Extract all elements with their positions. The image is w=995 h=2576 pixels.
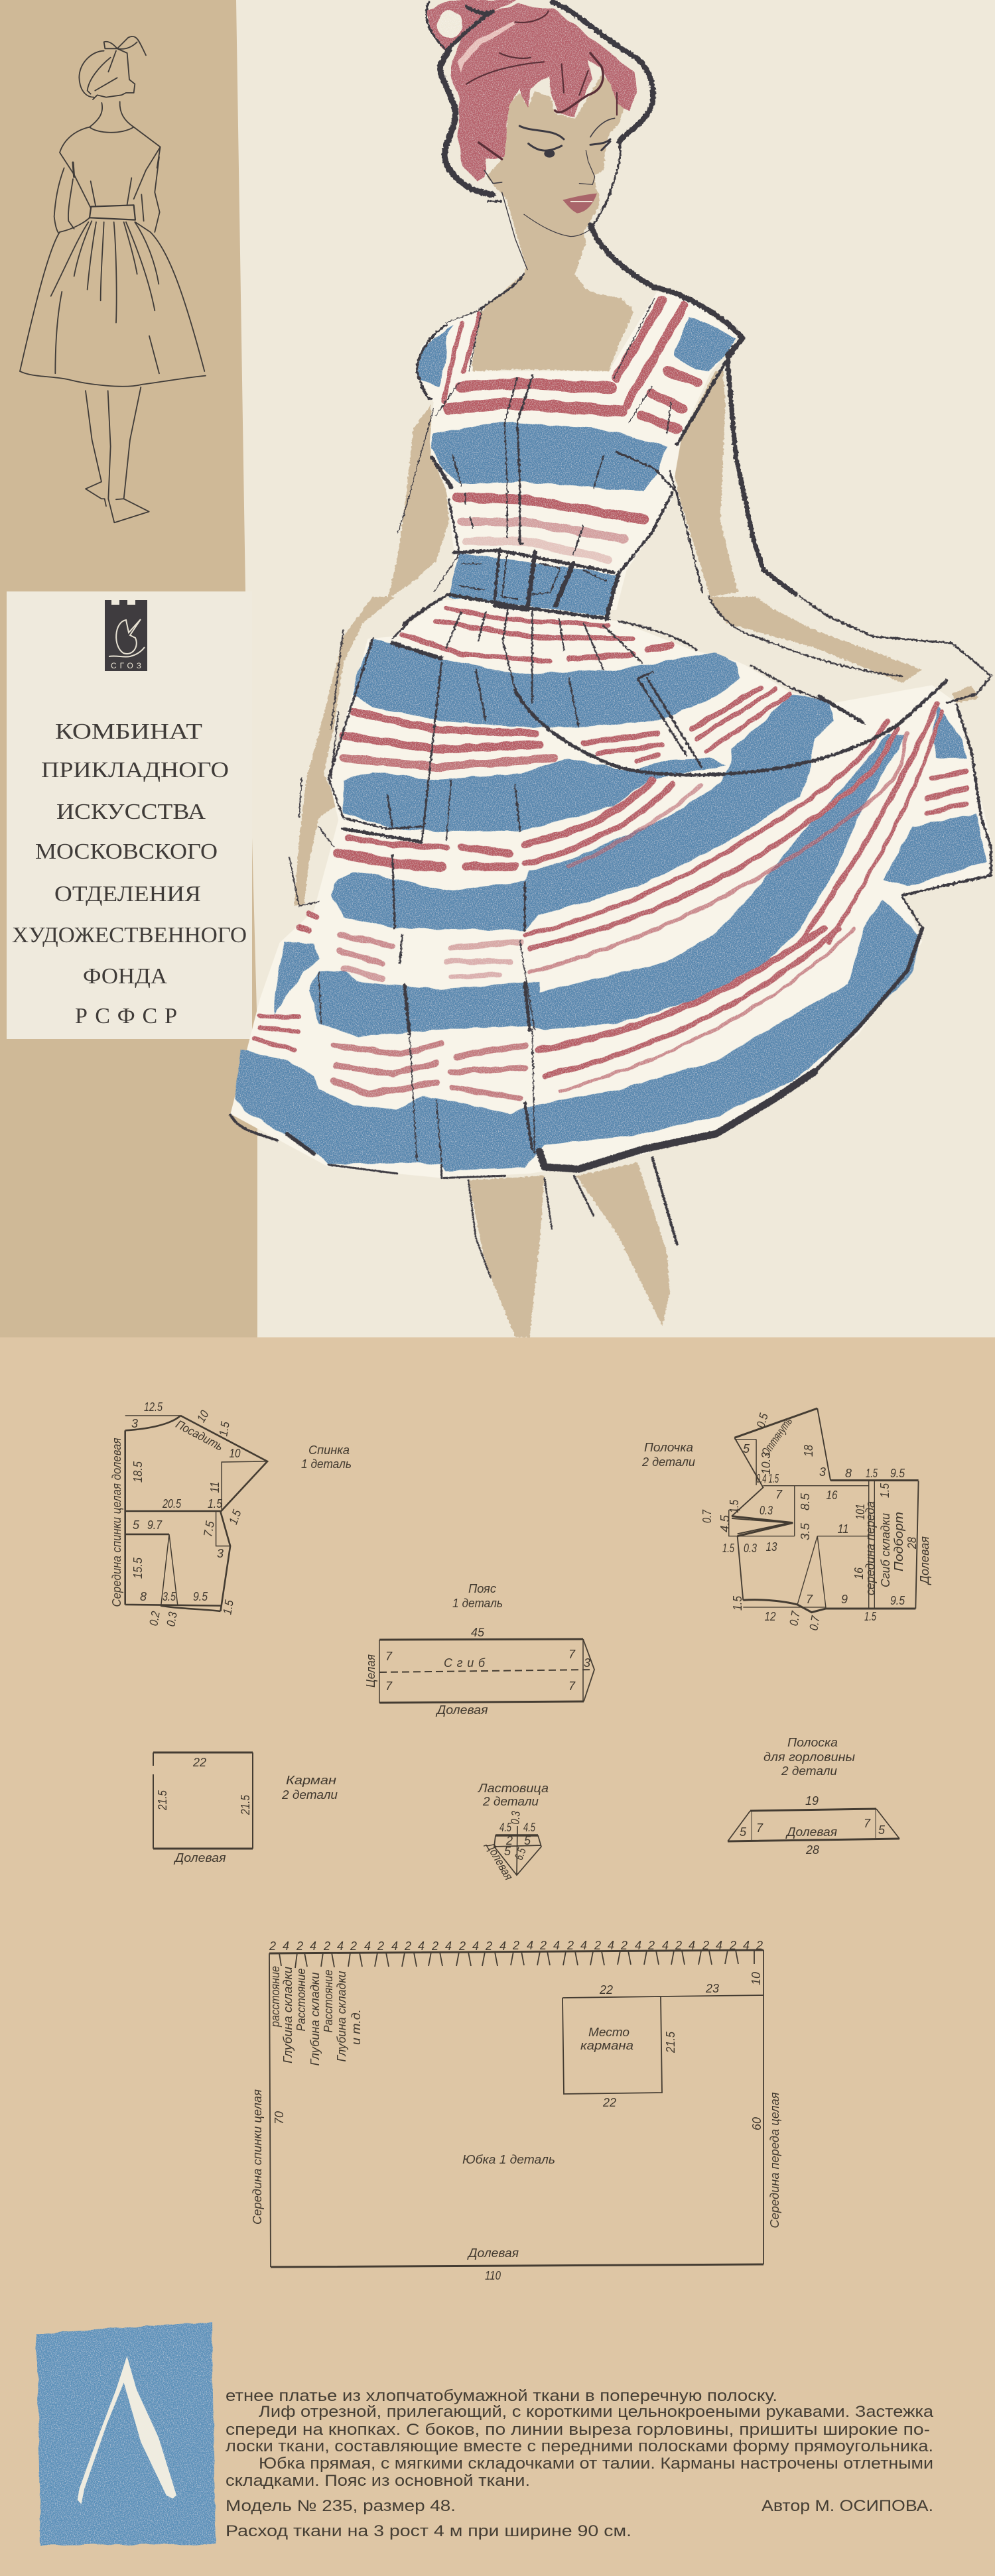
pattern piece: skirt (Юбка): 21.5 bbox=[664, 2031, 677, 2054]
pattern piece: gusset (Ластовица): 4.5 bbox=[499, 1821, 512, 1834]
pleat numbers row: 2 bbox=[458, 1939, 466, 1953]
pattern piece: front (Полочка): Оттянуть bbox=[759, 1415, 795, 1458]
pattern piece: pocket (Карман): 21.5 bbox=[156, 1790, 169, 1811]
pattern piece: neckline strip (Полоска): Долевая bbox=[785, 1825, 837, 1839]
article text: Лиф отрезной, прилегающий, с короткими цельнокроеными рукавами. Застежка bbox=[259, 2403, 934, 2421]
panel: atelier card bbox=[7, 591, 252, 1039]
pleat numbers row: 2 bbox=[756, 1939, 763, 1952]
arms and legs skin bbox=[295, 371, 978, 1337]
pleat numbers row: 2 bbox=[675, 1939, 682, 1952]
pleat numbers row: 4 bbox=[553, 1939, 560, 1952]
pattern piece: front (Полочка): 0.3 bbox=[744, 1542, 757, 1555]
pattern piece: skirt (Юбка): расстояние bbox=[269, 1966, 282, 2028]
pattern piece: front (Полочка): 2 детали bbox=[641, 1455, 695, 1469]
pattern piece: back (Спинка): Спинка bbox=[308, 1443, 350, 1457]
pattern piece: belt (Пояс): Целая bbox=[364, 1654, 377, 1687]
pattern piece: front (Полочка): 0.7 bbox=[700, 1509, 714, 1523]
pattern piece: front (Полочка): 1.5 bbox=[866, 1467, 878, 1480]
pattern piece: belt (Пояс): 7 bbox=[568, 1648, 576, 1661]
article text: Модель № 235, размер 48. bbox=[226, 2497, 456, 2515]
pleat numbers row: 2 bbox=[296, 1939, 303, 1953]
pattern piece: front (Полочка): 0.4 1.5 bbox=[756, 1472, 779, 1485]
card heading text bbox=[12, 719, 247, 1028]
pattern piece: gusset (Ластовица): Ластовица bbox=[478, 1782, 549, 1795]
pattern piece: front (Полочка): 9.5 bbox=[890, 1467, 905, 1480]
pattern piece: skirt (Юбка): 22 bbox=[602, 2096, 616, 2109]
card heading text: ФОНДА bbox=[83, 964, 167, 989]
card heading text: ХУДОЖЕСТВЕННОГО bbox=[12, 923, 247, 948]
dress white fabric base bbox=[230, 292, 991, 1178]
pattern piece: front (Полочка): 16 bbox=[827, 1489, 838, 1502]
pleat numbers row: 2 bbox=[647, 1939, 655, 1952]
pattern piece: gusset (Ластовица): 2 bbox=[505, 1834, 513, 1847]
pattern piece: back (Спинка): 10 bbox=[194, 1408, 212, 1424]
pattern piece: belt (Пояс): 3 bbox=[584, 1656, 590, 1670]
pattern piece: neckline strip (Полоска): 5 bbox=[878, 1823, 886, 1837]
pattern piece: front (Полочка): 18 bbox=[802, 1445, 815, 1457]
pattern piece: front (Полочка): 11 bbox=[837, 1522, 849, 1536]
pattern piece: back (Спинка): 1.5 bbox=[208, 1497, 223, 1510]
card heading text: РСФСР bbox=[75, 1004, 177, 1028]
pattern piece: back (Спинка): 1.5 bbox=[216, 1420, 232, 1438]
pattern piece: gusset (Ластовица): 4.5 bbox=[523, 1821, 536, 1834]
pleat numbers row: 2 bbox=[702, 1939, 709, 1952]
pattern piece: back (Спинка): 8 bbox=[140, 1590, 147, 1603]
pleat numbers row: 2 bbox=[512, 1939, 519, 1952]
card heading text: ПРИКЛАДНОГО bbox=[41, 758, 229, 782]
pattern piece: back (Спинка): 3.5 bbox=[163, 1590, 176, 1603]
pattern piece: back (Спинка): 11 bbox=[208, 1481, 222, 1493]
pattern piece: neckline strip (Полоска): 7 bbox=[864, 1817, 871, 1830]
pattern piece: front (Полочка): 4.5 bbox=[718, 1514, 732, 1532]
pattern piece: neckline strip (Полоска): 2 детали bbox=[781, 1764, 837, 1778]
pattern piece: skirt (Юбка) bbox=[251, 1939, 781, 2282]
card heading text: МОСКОВСКОГО bbox=[35, 839, 218, 864]
pattern piece: gusset (Ластовица): 5 bbox=[504, 1845, 511, 1858]
pleat numbers row: 4 bbox=[580, 1939, 587, 1952]
pattern piece: gusset (Ластовица): 5 bbox=[524, 1834, 531, 1847]
pattern piece: front (Полочка): Сгиб складки bbox=[879, 1513, 892, 1587]
pattern piece: skirt (Юбка): 60 bbox=[750, 2117, 763, 2130]
article text: лоски ткани, составляющие вместе с передними полосками форму прямоугольника. bbox=[226, 2437, 933, 2455]
card heading text: ОТДЕЛЕНИЯ bbox=[54, 882, 201, 906]
pattern piece: front (Полочка): 0.7 bbox=[807, 1615, 823, 1632]
pattern piece: neckline strip (Полоска): для горловины bbox=[763, 1750, 855, 1764]
pleat numbers row: 4 bbox=[364, 1939, 371, 1953]
pattern piece: belt (Пояс) bbox=[364, 1582, 594, 1717]
pattern piece: pocket (Карман): 22 bbox=[192, 1756, 206, 1769]
article text: Автор М. ОСИПОВА. bbox=[762, 2497, 933, 2515]
pattern piece: belt (Пояс): Сгиб bbox=[444, 1656, 486, 1670]
pattern piece: front (Полочка): 0.7 bbox=[787, 1610, 803, 1627]
face features bbox=[466, 11, 617, 270]
pattern piece: front (Полочка): 9 bbox=[841, 1593, 848, 1606]
pleat numbers row: 2 bbox=[323, 1939, 330, 1953]
pattern piece: front (Полочка): 8.5 bbox=[799, 1493, 812, 1510]
pleat numbers row: 4 bbox=[527, 1939, 533, 1952]
pleat numbers row: 4 bbox=[716, 1939, 722, 1952]
pattern piece: skirt (Юбка): 70 bbox=[273, 2111, 286, 2124]
pattern piece: neckline strip (Полоска): 7 bbox=[756, 1821, 763, 1835]
pleat numbers row: 2 bbox=[485, 1939, 492, 1953]
pattern piece: front (Полочка): 1.5 bbox=[864, 1610, 877, 1623]
pattern piece: skirt (Юбка): 22 bbox=[599, 1983, 613, 1996]
pattern piece: skirt (Юбка): кармана bbox=[580, 2039, 633, 2052]
pleat numbers row: 2 bbox=[566, 1939, 574, 1952]
pattern piece: back (Спинка): 3 bbox=[131, 1417, 138, 1430]
pattern piece: pocket (Карман): Долевая bbox=[173, 1851, 226, 1865]
pattern piece: skirt (Юбка): Середина переда целая bbox=[768, 2092, 781, 2228]
pattern piece: back (Спинка): 3 bbox=[217, 1547, 224, 1560]
pattern piece: front (Полочка): 28 bbox=[905, 1537, 919, 1550]
card heading text: ИСКУССТВА bbox=[56, 800, 206, 824]
dress blue stripes bbox=[235, 316, 986, 1172]
article text: складками. Пояс из основной ткани. bbox=[226, 2472, 530, 2490]
pattern piece: skirt (Юбка): Глубина складки bbox=[308, 1972, 322, 2066]
pattern piece: front (Полочка): 8 bbox=[845, 1467, 852, 1480]
pleat numbers row: 4 bbox=[662, 1939, 669, 1952]
card heading text: КОМБИНАТ bbox=[55, 719, 202, 744]
pattern piece: belt (Пояс): 45 bbox=[471, 1626, 485, 1639]
pattern piece: front (Полочка): 12 bbox=[764, 1610, 776, 1623]
pattern piece: skirt (Юбка): 23 bbox=[705, 1982, 719, 1995]
article text: Юбка прямая, с мягкими складочками от талии. Карманы настрочены отлетными bbox=[259, 2455, 933, 2473]
pattern piece: skirt (Юбка): Расстояние bbox=[322, 1969, 335, 2033]
pattern piece: front (Полочка): 13 bbox=[765, 1540, 777, 1554]
pattern piece: front (Полочка): 1.5 bbox=[722, 1542, 735, 1555]
pattern piece: pocket (Карман): 21.5 bbox=[239, 1794, 252, 1815]
pattern piece: pocket (Карман) bbox=[153, 1752, 338, 1865]
pattern piece: back (Спинка): 1.5 bbox=[220, 1599, 236, 1616]
pleat numbers row: 4 bbox=[608, 1939, 614, 1952]
pleat numbers row: 4 bbox=[689, 1939, 695, 1952]
pleat numbers row: 4 bbox=[337, 1939, 344, 1953]
pattern piece: skirt (Юбка): Место bbox=[588, 2026, 630, 2039]
pattern piece: back (Спинка): 0.3 bbox=[164, 1611, 180, 1628]
pattern piece: skirt (Юбка): Глубина складки bbox=[281, 1967, 295, 2063]
pleat numbers row: 2 bbox=[539, 1939, 547, 1952]
pattern piece: neckline strip (Полоска): 5 bbox=[740, 1825, 747, 1839]
pleat numbers row: 4 bbox=[391, 1939, 398, 1953]
pattern piece: pocket (Карман): 2 детали bbox=[281, 1788, 338, 1802]
pattern piece: back (Спинка): 5 bbox=[133, 1518, 140, 1532]
back view sketch of the dress bbox=[20, 36, 206, 522]
pattern piece: back (Спинка): Посадить bbox=[174, 1418, 226, 1453]
pleat numbers row: 4 bbox=[499, 1939, 506, 1953]
pleat numbers row: 4 bbox=[472, 1939, 479, 1953]
pleat tick marks bbox=[279, 1950, 754, 1968]
pattern piece: back (Спинка): 9.5 bbox=[193, 1590, 208, 1603]
article text: спереди на кнопках. С боков, по линии выреза горловины, пришиты широкие по- bbox=[226, 2421, 930, 2439]
pattern piece: belt (Пояс): Пояс bbox=[468, 1582, 496, 1595]
pattern piece: skirt (Юбка): 10 bbox=[750, 1972, 763, 1985]
pattern piece: front (Полочка): 101 bbox=[854, 1504, 867, 1520]
pleat numbers row: 2 bbox=[594, 1939, 601, 1952]
hair and bow bbox=[427, 0, 637, 181]
pattern piece: front (Полочка): 9.5 bbox=[890, 1594, 905, 1607]
pleat numbers row: 2 bbox=[350, 1939, 357, 1953]
pattern piece: front (Полочка): 16 bbox=[852, 1567, 866, 1579]
pattern piece: neckline strip (Полоска) bbox=[728, 1736, 899, 1857]
pattern piece: back (Спинка): 7.5 bbox=[201, 1519, 217, 1538]
skirt hem ink bbox=[230, 928, 922, 1278]
pattern piece: front (Полочка) bbox=[641, 1408, 931, 1632]
pleat numbers row: 2 bbox=[404, 1939, 411, 1953]
pattern piece: front (Полочка): 7 bbox=[775, 1488, 783, 1501]
pattern piece: front (Полочка): Долевая bbox=[918, 1536, 931, 1585]
pattern piece: back (Спинка): 20.5 bbox=[162, 1497, 182, 1510]
pattern piece: belt (Пояс): 7 bbox=[385, 1680, 393, 1693]
pattern piece: belt (Пояс): Долевая bbox=[435, 1703, 488, 1717]
pattern piece: belt (Пояс): 7 bbox=[568, 1680, 576, 1693]
pleat numbers row: 2 bbox=[620, 1939, 628, 1952]
pattern piece: skirt (Юбка): 110 bbox=[485, 2269, 501, 2282]
article text bbox=[226, 2387, 934, 2540]
pleat numbers row: 4 bbox=[445, 1939, 452, 1953]
pattern piece: front (Полочка): 10.3 bbox=[760, 1452, 773, 1475]
pleat numbers row: 2 bbox=[269, 1939, 276, 1953]
pattern piece: front (Полочка): 3.5 bbox=[799, 1522, 812, 1540]
pattern piece: skirt (Юбка): и т.д. bbox=[350, 2009, 363, 2045]
pattern piece: front (Полочка): 0.3 bbox=[760, 1504, 773, 1517]
article text: етнее платье из хлопчатобумажной ткани в поперечную полоску. bbox=[226, 2387, 777, 2405]
pleat numbers row: 2 bbox=[377, 1939, 384, 1953]
main illustration: woman in striped dress bbox=[230, 0, 991, 1337]
pattern piece: pocket (Карман): Карман bbox=[286, 1774, 336, 1787]
pattern piece: back (Спинка): 1.5 bbox=[226, 1507, 244, 1526]
pattern piece: front (Полочка): середина переда bbox=[864, 1501, 877, 1595]
pattern piece: front (Полочка): Полочка bbox=[644, 1441, 693, 1454]
left tan column bbox=[0, 0, 257, 1337]
pleat numbers row: 4 bbox=[418, 1939, 425, 1953]
pattern piece: gusset (Ластовица) bbox=[478, 1782, 549, 1882]
pattern piece: skirt (Юбка): Юбка 1 деталь bbox=[462, 2153, 555, 2166]
pleat numbers row: 2 bbox=[431, 1939, 438, 1953]
pattern piece: front (Полочка): 1.5 bbox=[728, 1499, 741, 1513]
neck, face and chest skin bbox=[472, 75, 634, 371]
pattern piece: neckline strip (Полоска): 19 bbox=[805, 1794, 819, 1808]
ink outlines of figure and dress bbox=[289, 2, 991, 1162]
drop cap block: blue square with letter Л bbox=[36, 2322, 216, 2545]
pattern piece: back (Спинка): 9.7 bbox=[147, 1518, 163, 1532]
pattern piece: front (Полочка): 3 bbox=[819, 1465, 826, 1479]
pattern piece: skirt (Юбка): Долевая bbox=[467, 2246, 519, 2260]
pleat numbers row: 4 bbox=[283, 1939, 289, 1953]
pattern piece: gusset (Ластовица): Долевая bbox=[483, 1839, 516, 1882]
illustration panel: cream background bbox=[0, 0, 995, 1337]
pattern piece: front (Полочка): Подборт bbox=[892, 1512, 905, 1571]
dress red stripes bbox=[255, 300, 966, 1099]
pattern piece: gusset (Ластовица): 0.3 bbox=[508, 1811, 523, 1825]
pattern piece: belt (Пояс): 1 деталь bbox=[452, 1597, 503, 1610]
pattern piece: skirt (Юбка): Расстояние bbox=[295, 1968, 308, 2032]
pattern piece: back (Спинка): 1 деталь bbox=[301, 1457, 352, 1471]
pattern piece: skirt (Юбка): Глубина складки bbox=[335, 1971, 348, 2062]
pattern piece: gusset (Ластовица): 6.5 bbox=[512, 1845, 529, 1862]
pattern piece: front (Полочка): 1.5 bbox=[878, 1483, 892, 1498]
article text: Расход ткани на 3 рост 4 м при ширине 90 см. bbox=[226, 2522, 631, 2540]
pattern piece: front (Полочка): 1.5 bbox=[731, 1595, 744, 1611]
pattern piece: belt (Пояс): 7 bbox=[385, 1650, 393, 1663]
pattern piece: gusset (Ластовица): 2 детали bbox=[482, 1795, 539, 1808]
pattern piece: back (Спинка): 10 bbox=[230, 1447, 240, 1460]
pattern piece: neckline strip (Полоска): 28 bbox=[805, 1843, 819, 1857]
pattern piece: skirt (Юбка): Середина спинки целая bbox=[251, 2089, 264, 2225]
pleat numbers row: 4 bbox=[743, 1939, 750, 1952]
pattern piece: front (Полочка): 7 bbox=[806, 1593, 813, 1606]
pattern piece: neckline strip (Полоска): Полоска bbox=[787, 1736, 838, 1749]
logo: tower emblem bbox=[105, 600, 147, 671]
pleat numbers row: 4 bbox=[635, 1939, 641, 1952]
pattern piece: back (Спинка) bbox=[110, 1400, 352, 1628]
pleat numbers row: 4 bbox=[310, 1939, 316, 1953]
pattern piece: back (Спинка): 15.5 bbox=[131, 1557, 145, 1579]
pattern piece: front (Полочка): 0.5 bbox=[754, 1411, 771, 1430]
logo: tower emblem: СГОЗ bbox=[111, 661, 141, 670]
pleat numbers row bbox=[269, 1939, 763, 1953]
pattern piece: back (Спинка): 0.2 bbox=[147, 1610, 163, 1627]
pattern piece: front (Полочка): 5 bbox=[743, 1442, 750, 1455]
pattern piece: back (Спинка): Середина спинки целая долевая bbox=[110, 1438, 123, 1607]
pattern piece: back (Спинка): 18.5 bbox=[131, 1461, 145, 1483]
pleat numbers row: 2 bbox=[729, 1939, 736, 1952]
pattern piece: back (Спинка): 12.5 bbox=[144, 1400, 163, 1414]
